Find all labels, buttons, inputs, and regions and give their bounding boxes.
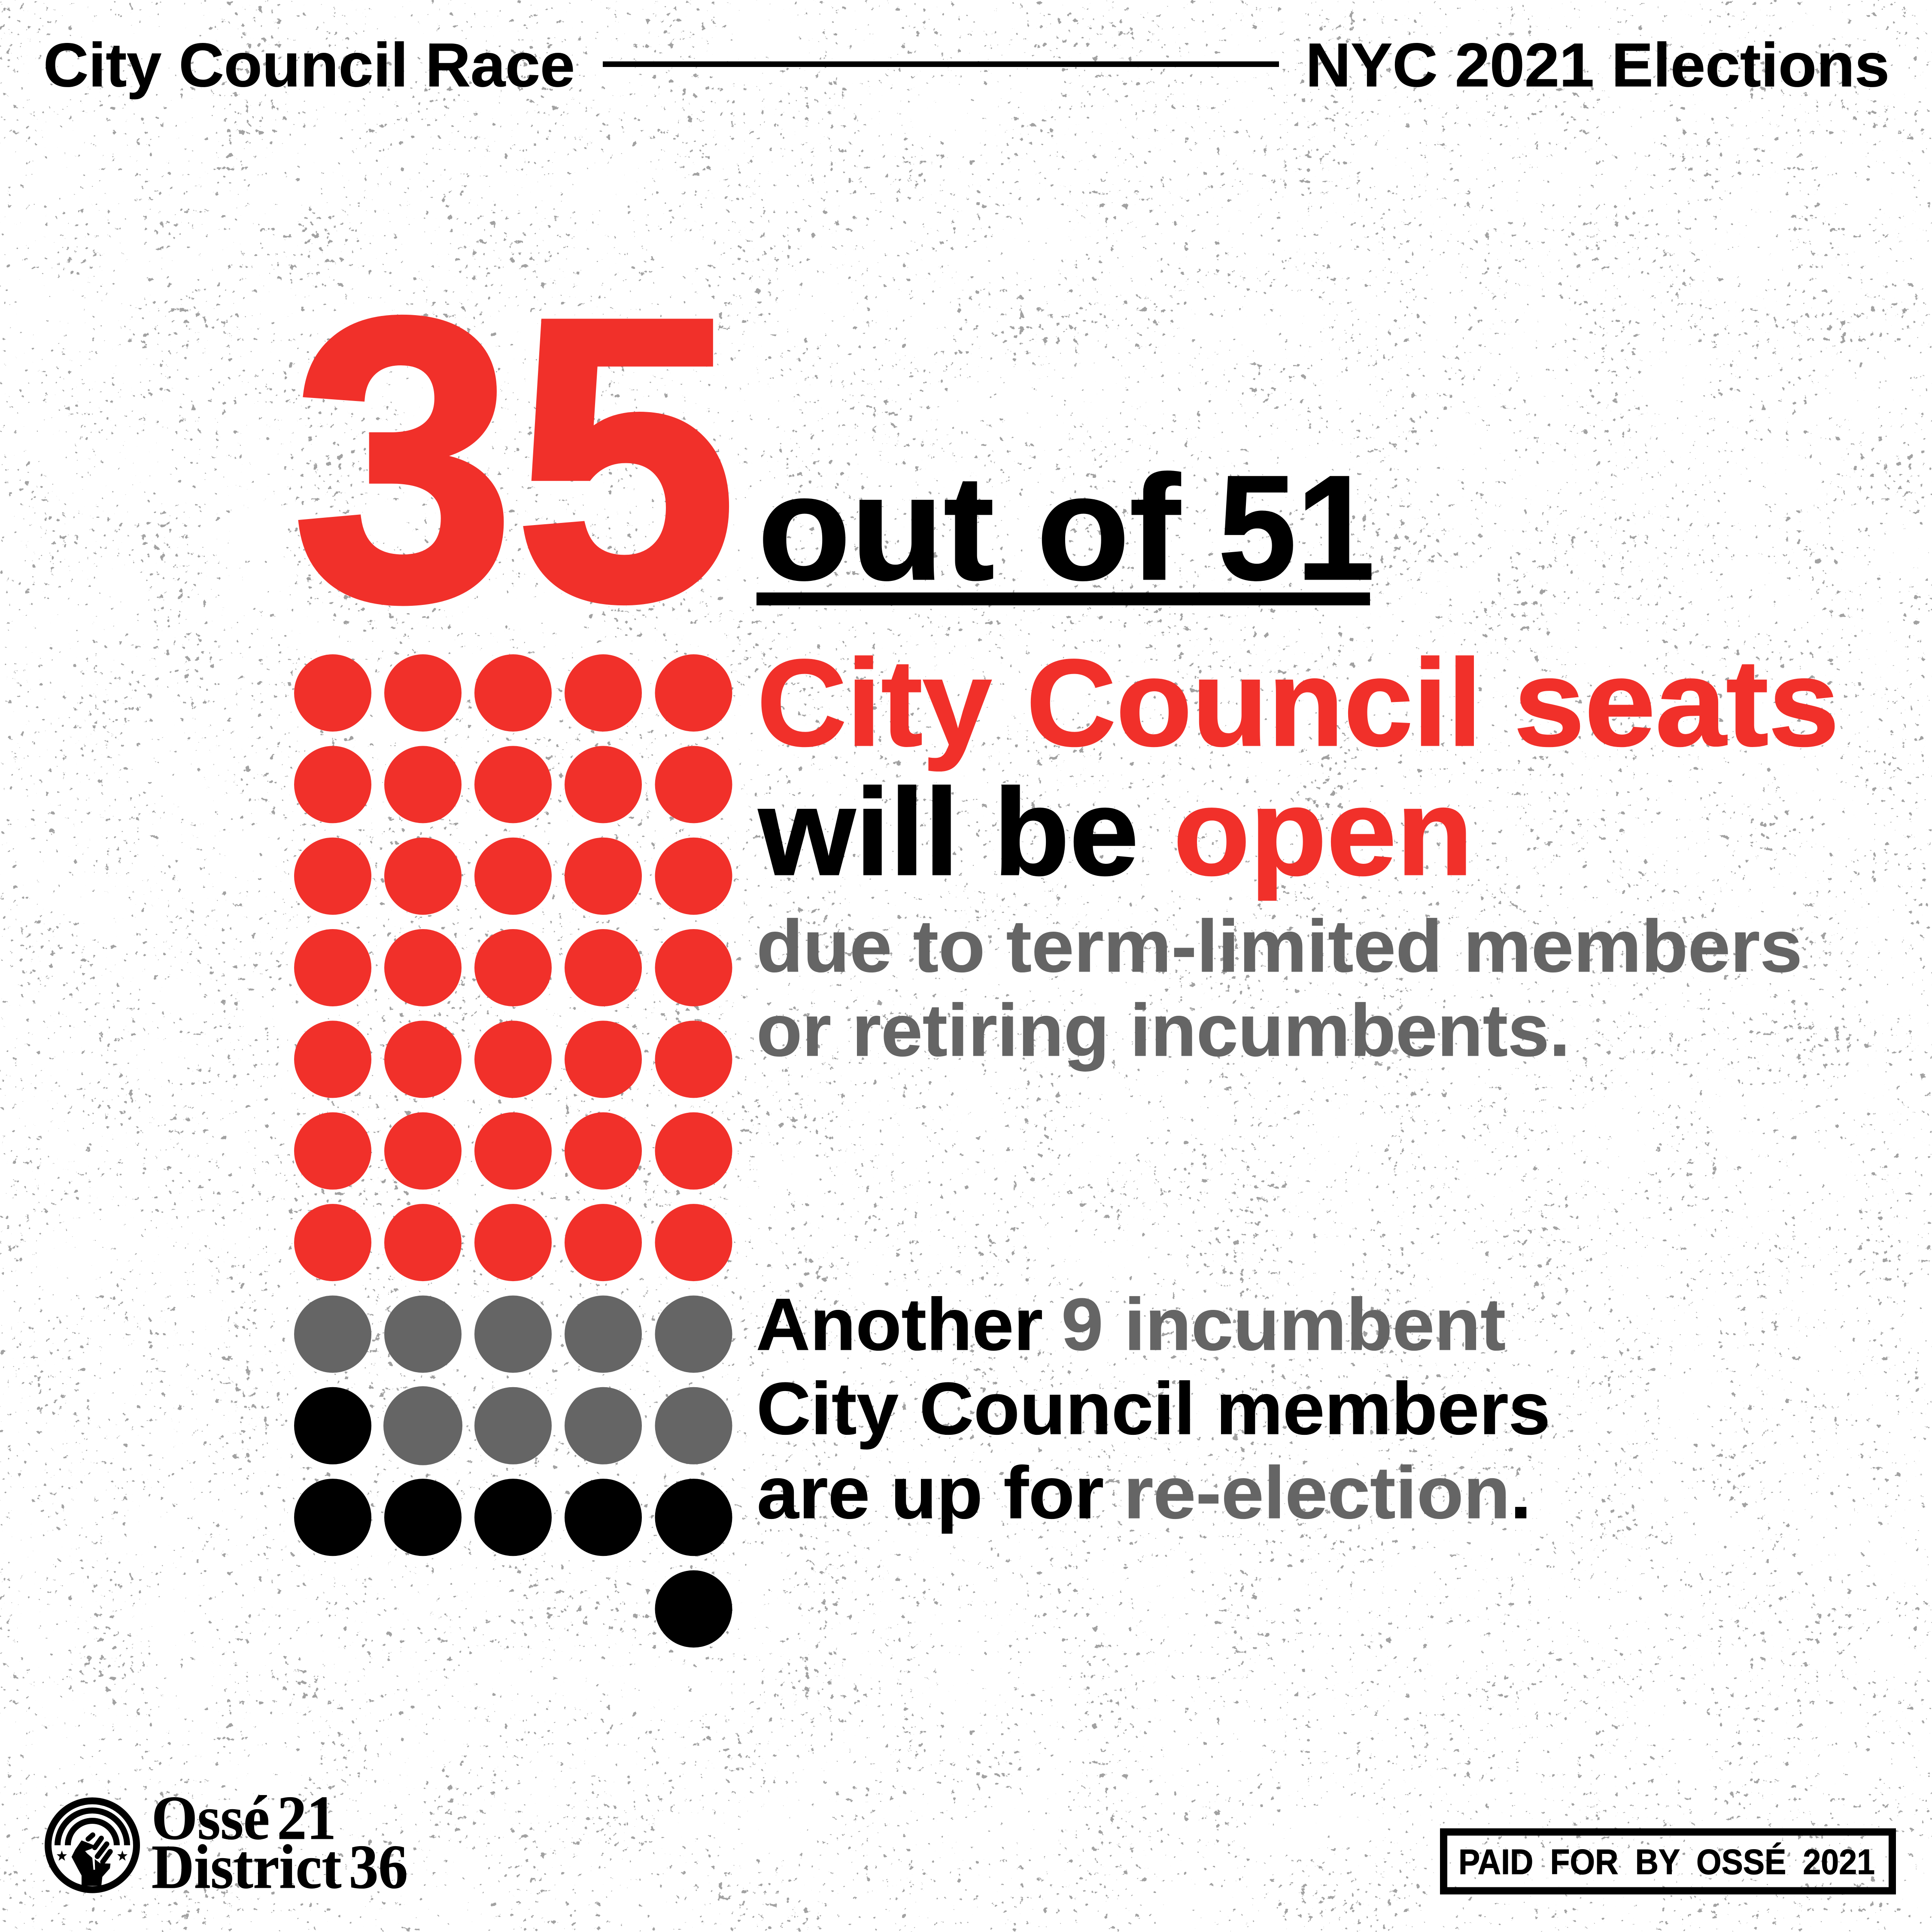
icon: raised fist emblem xyxy=(48,1801,137,1890)
grey dots: 9 incumbents xyxy=(294,1296,732,1465)
line: due to term-limited members: due to term-limited members xyxy=(756,905,1802,987)
line: City Council: City Council xyxy=(757,634,1482,772)
line: open: open xyxy=(1173,763,1473,902)
line: re-election.: re-election. xyxy=(1124,1452,1531,1534)
line: seats: seats xyxy=(1514,634,1839,772)
box border xyxy=(1443,1832,1893,1891)
51 text: 51 xyxy=(1218,444,1375,611)
text block: re-election xyxy=(756,1283,1550,1534)
line: 9 incumbent: 9 incumbent xyxy=(1061,1283,1506,1366)
red dots: 35 open seats xyxy=(294,654,732,1281)
big number 35: 35 xyxy=(293,235,737,683)
black dots: remaining 7 seats xyxy=(294,1387,732,1648)
underline xyxy=(756,592,1370,605)
disclaimer text: PAID FOR BY OSSÉ 2021 xyxy=(1458,1842,1875,1882)
line: Another: Another xyxy=(756,1283,1043,1366)
header left title: City Council Race xyxy=(43,30,575,100)
paid for by box xyxy=(1443,1832,1893,1891)
header right title: NYC 2021 Elections xyxy=(1306,30,1889,100)
logo line: District 36: District 36 xyxy=(152,1832,408,1902)
line: or retiring incumbents: or retiring incumbents. xyxy=(756,989,1570,1072)
text block: open seats xyxy=(756,634,1839,1072)
header rule xyxy=(603,61,1279,67)
out of text: out of xyxy=(758,444,1182,611)
line: will be: will be xyxy=(756,763,1139,901)
heading: out of 51 xyxy=(756,444,1375,611)
line: are up for: are up for xyxy=(757,1452,1104,1534)
logo line: Ossé 21: Ossé 21 xyxy=(152,1783,336,1853)
line: City Council members: City Council members xyxy=(756,1367,1550,1450)
dot chart: 51 council seats xyxy=(294,654,732,1648)
logo: Ossé 21 District 36 xyxy=(48,1783,408,1902)
header xyxy=(43,30,1889,100)
